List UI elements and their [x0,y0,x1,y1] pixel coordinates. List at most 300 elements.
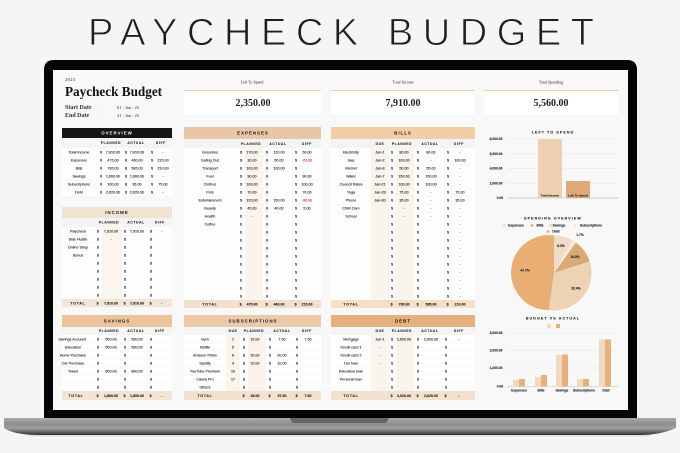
panel: subscriptions: Gym [201,337,209,341]
card: left to spend [184,80,321,114]
panel: overview: Expenses [71,158,87,162]
panel: overview: ACTUAL [127,141,145,145]
panel: expenses: - [251,214,253,218]
panel: subscriptions: $ [296,353,298,357]
chart: spending pie: 47.7% [520,268,530,272]
chart: spending overview legend: Expenses [508,224,524,228]
panel: expenses: $ [240,174,242,178]
panel: subscriptions: $ [243,394,245,398]
panel: bills: 55.00 [426,166,436,170]
sheet title block: 01 - Jan - 23 [117,105,140,110]
panel: bills: - [403,206,405,210]
panel: debt: $ [391,385,393,389]
panel: bills: - [459,278,461,282]
panel: subscriptions: $ [243,345,245,349]
panel: bills: - [430,214,432,218]
panel: debt: 2,620.00 [397,394,411,398]
panel: bills: 75.00 [455,190,465,194]
panel: debt: $ [445,394,447,398]
chart: budget vs actual bars: Expenses [511,388,527,392]
panel: income: $ [97,301,99,305]
panel: overview: 795.00 [107,166,119,170]
panel: bills: 100.00 [425,182,437,186]
panel: income: ACTUAL [127,221,145,225]
panel: debt: - [379,361,381,365]
panel: overview: - [162,174,164,178]
panel: savings: $ [97,361,99,365]
panel: bills: Jan-1 [375,150,385,154]
panel: income: 7,910.00 [104,301,118,305]
panel: expenses: $ [295,294,297,298]
panel: debt: DIFF [454,329,464,333]
panel: bills: DUE [376,142,384,146]
panel: expenses: $ [240,206,242,210]
panel: savings: Home Purchase [60,353,86,357]
panel: subscriptions: $ [296,361,298,365]
panel: bills: 100.00 [454,158,466,162]
panel: savings [58,315,172,400]
panel: savings: $ [150,377,152,381]
panel: expenses: Coffee [205,222,215,226]
panel: bills: Electricity [343,150,359,154]
panel: expenses: $ [240,238,242,242]
panel: expenses: 100.00 [273,166,285,170]
panel: expenses: Entertainment [199,198,221,202]
panel: expenses: 100.00 [246,166,258,170]
panel: expenses: $ [295,286,297,290]
panel: debt: TOTAL [343,394,359,398]
panel: bills: Jan-30 [374,198,386,202]
panel: bills: Phone [346,198,356,202]
chart: budget vs actual bars: Debt [602,388,611,392]
panel: subscriptions: $ [269,377,271,381]
panel: expenses: $ [240,254,242,258]
panel: debt: Credit card 2 [340,353,362,357]
panel: expenses: $ [240,262,242,266]
panel: expenses: $ [266,150,268,154]
panel: expenses: $ [266,190,268,194]
panel: bills: - [430,198,432,202]
panel: bills: - [459,206,461,210]
panel: expenses: $ [266,230,268,234]
panel: subscriptions: Amazon Prime [193,353,217,357]
panel: expenses: Groceries [202,150,218,154]
panel: subscriptions: 10 [231,369,235,373]
panel: expenses: $ [295,150,297,154]
panel: subscriptions: 7.50 [278,337,286,341]
panel: debt: $ [417,385,419,389]
panel: bills: $ [447,182,449,186]
panel: expenses: -20.00 [302,158,312,162]
panel: bills: - [459,238,461,242]
panel: bills: $ [447,230,449,234]
panel: overview: $ [100,166,102,170]
panel: overview: - [162,150,164,154]
panel: expenses: PLANNED [241,142,261,146]
panel: bills: $ [447,214,449,218]
panel: overview: 215.00 [157,158,169,162]
panel: income: $ [150,301,152,305]
panel: debt: $ [445,345,447,349]
panel: expenses: $ [295,230,297,234]
panel: subscriptions: $ [269,385,271,389]
panel: overview: 1,800.00 [106,174,120,178]
chart: left to spend bars [490,130,618,200]
panel: bills: - [430,190,432,194]
panel: debt [331,315,475,400]
panel: bills: $ [447,286,449,290]
panel: bills: Jan-7 [375,174,385,178]
panel: savings: $ [97,369,99,373]
chart: budget vs actual bars: 3,000.00 [490,331,503,335]
panel: debt: $ [391,337,393,341]
panel: bills: $ [417,198,419,202]
panel: overview: 100.00 [107,182,119,186]
panel: subscriptions: Spotify [199,361,211,365]
panel: savings: $ [97,345,99,349]
panel: subscriptions: YouTube Premium [190,369,220,373]
panel: expenses: 100.00 [301,182,313,186]
panel: savings: $ [150,345,152,349]
panel: overview: PLANNED [101,141,121,145]
panel: expenses: $ [266,158,268,162]
panel: expenses: DIFF [302,142,312,146]
panel: bills: - [459,262,461,266]
panel: income: $ [97,285,99,289]
panel: savings: $ [150,337,152,341]
panel: debt: $ [445,377,447,381]
panel: expenses: $ [266,174,268,178]
panel: savings: - [161,394,163,398]
panel: subscriptions: 45.00 [250,394,260,398]
sheet title block: Paycheck Budget [65,84,163,99]
panel: bills: - [459,166,461,170]
panel: debt: $ [417,361,419,365]
panel: bills: $ [391,198,393,202]
panel: income: $ [124,245,126,249]
panel: debt: $ [445,361,447,365]
panel: expenses: $ [240,230,242,234]
panel: overview: $ [151,166,153,170]
panel: bills: Child Care [342,206,360,210]
panel: bills: 50.00 [399,166,409,170]
panel: expenses: $ [240,214,242,218]
panel: bills: - [459,150,461,154]
panel: expenses: 460.00 [274,302,284,306]
panel: overview: 95.00 [132,182,142,186]
panel: subscriptions: $ [269,394,271,398]
panel: subscriptions: $ [296,377,298,381]
panel: savings: $ [97,353,99,357]
panel: subscriptions: SUBSCRIPTIONS [228,319,278,324]
panel: expenses: $ [240,270,242,274]
panel: subscriptions: $ [243,337,245,341]
panel: subscriptions: $ [296,345,298,349]
panel: expenses [184,127,321,308]
panel: subscriptions: $ [296,394,298,398]
panel: income: INCOME [105,210,129,215]
panel: bills: ACTUAL [421,142,439,146]
panel: savings: TOTAL [68,394,84,398]
panel: bills: - [459,286,461,290]
panel: subscriptions: 15.00 [250,337,260,341]
panel: debt: 2,620.00 [397,337,411,341]
panel: savings: 800.00 [105,369,117,373]
panel: expenses: 5.00 [303,206,311,210]
panel: debt: $ [417,345,419,349]
panel: bills: $ [447,262,449,266]
panel: income: $ [97,245,99,249]
panel: bills: DIFF [454,142,464,146]
panel: expenses: $ [266,262,268,266]
panel: subscriptions: 7.50 [304,337,312,341]
panel: expenses: $ [295,262,297,266]
chart: spending pie: 10.8% [570,255,580,259]
card: total income: Total Income [392,80,414,84]
panel: expenses: $ [266,222,268,226]
panel: expenses: EXPENSES [237,131,269,136]
panel: subscriptions: $ [243,361,245,365]
panel: expenses: $ [295,278,297,282]
panel: bills: 795.00 [398,302,410,306]
panel: expenses: $ [295,166,297,170]
panel: expenses: $ [295,158,297,162]
chart: spending pie [511,233,592,310]
panel: bills: $ [447,174,449,178]
panel: bills: Water [346,174,357,178]
panel: bills: $ [447,246,449,250]
panel: bills: $ [417,166,419,170]
panel: expenses: Fuel [206,174,214,178]
panel: bills: $ [417,222,419,226]
panel: bills: 100.00 [398,182,410,186]
panel: bills: $ [447,302,449,306]
panel: expenses: $ [295,190,297,194]
card: left to spend: Left To Spend [241,80,263,84]
panel: expenses: $ [295,198,297,202]
panel: debt: $ [445,353,447,357]
panel: bills: $ [391,270,393,274]
panel: expenses: 90.00 [247,174,257,178]
panel: bills: $ [391,174,393,178]
panel: bills: $ [417,230,419,234]
panel: debt: DEBT [395,319,411,324]
panel: expenses: Pets [206,190,214,194]
panel: bills: - [459,174,461,178]
panel: bills: $ [447,254,449,258]
panel: bills: $ [417,238,419,242]
panel: overview: $ [151,174,153,178]
panel: subscriptions: 17 [231,377,235,381]
chart: spending overview legend: Savings [553,224,565,228]
panel: overview: $ [100,158,102,162]
panel: expenses: 150.00 [273,198,285,202]
panel: debt: Credit card 1 [340,345,362,349]
panel: expenses: Transport [202,166,218,170]
panel: bills: 80.00 [426,150,436,154]
panel: subscriptions: Others [199,385,211,389]
panel: expenses: 40.00 [274,206,284,210]
panel: savings: $ [150,353,152,357]
chart: spending overview legend: Debt [552,230,561,234]
panel: bills: $ [447,150,449,154]
panel: bills: 210.00 [454,302,466,306]
panel: debt: $ [417,369,419,373]
panel: bills: $ [391,214,393,218]
panel: overview: $ [125,150,127,154]
panel: expenses: ACTUAL [269,142,287,146]
panel: overview: $ [151,150,153,154]
panel: bills: $ [447,278,449,282]
panel: overview: $ [125,182,127,186]
panel: income: 7,910.00 [130,229,144,233]
chart: budget vs actual bars: 0.00 [497,385,503,389]
panel: subscriptions: 7.50 [304,394,312,398]
panel: overview: Debt [75,190,83,194]
panel: subscriptions: $ [296,385,298,389]
panel: savings: $ [97,394,99,398]
panel: savings: $ [97,337,99,341]
panel: debt: $ [391,377,393,381]
panel: bills: $ [391,286,393,290]
panel: debt: $ [417,337,419,341]
panel: income: $ [150,261,152,265]
title: PAYCHECK BUDGET [88,12,594,54]
panel: overview: $ [151,158,153,162]
panel: bills: $ [447,158,449,162]
panel: savings: 1,800.00 [104,394,118,398]
panel: bills: 100.00 [398,158,410,162]
chart: left to spend bars: LEFT TO SPEND [532,130,574,134]
panel: income: 7,910.00 [104,229,118,233]
panel: expenses: $ [266,270,268,274]
panel: income: $ [124,261,126,265]
panel: debt: 2,620.00 [424,394,438,398]
panel: expenses: $ [295,270,297,274]
panel: overview: $ [125,174,127,178]
panel: income: Online Shop [68,245,88,249]
panel: overview: 1,800.00 [130,174,144,178]
panel: debt: ACTUAL [421,329,439,333]
panel: savings: PLANNED [99,329,119,333]
panel: savings: 800.00 [131,369,143,373]
panel: overview [62,128,172,196]
panel: expenses: TOTAL [202,302,218,306]
panel: expenses: $ [266,206,268,210]
panel: bills: - [403,214,405,218]
panel: income: $ [150,237,152,241]
panel: bills: - [459,222,461,226]
panel: bills: $ [417,270,419,274]
panel: bills: Jan-21 [374,182,386,186]
panel: income: Paycheck [70,229,86,233]
panel: bills: 80.00 [399,150,409,154]
panel: overview: DIFF [156,141,166,145]
chart: budget vs actual bars: Bills [538,388,545,392]
panel: debt: Education loan [339,369,363,373]
panel: expenses: 30.00 [247,158,257,162]
panel: bills: 150.00 [398,174,410,178]
panel: savings: SAVINGS [104,319,130,324]
panel: subscriptions [184,315,321,400]
chart: budget vs actual bars: Savings [556,388,568,392]
panel: debt: $ [417,394,419,398]
panel: bills: 75.00 [399,190,409,194]
panel: savings: Savings Account [58,337,86,341]
panel: savings: 500.00 [105,337,117,341]
panel: overview: $ [125,190,127,194]
chart: left to spend bars: 6,000.00 [490,152,503,156]
sheet title block: Start Date [65,105,92,111]
panel: bills: - [459,230,461,234]
panel: income: Side Hustle [69,237,87,241]
panel: bills: $ [417,150,419,154]
chart: budget vs actual bars: BUDGET VS ACTUAL [526,316,580,320]
panel: debt: $ [445,369,447,373]
panel: bills: $ [417,302,419,306]
panel: expenses: $ [240,190,242,194]
panel: overview: Total Income [69,150,89,154]
panel: bills: - [459,214,461,218]
panel: income: - [161,229,163,233]
panel: bills: - [430,158,432,162]
panel: bills: $ [447,206,449,210]
panel: savings: $ [150,361,152,365]
panel: expenses: $ [295,182,297,186]
panel: income: - [110,237,112,241]
panel: savings: $ [150,369,152,373]
card: total spending: 5,560.00 [534,98,568,109]
panel: expenses: $ [240,278,242,282]
panel: expenses: $ [240,150,242,154]
chart: spending overview legend: Bills [537,224,544,228]
panel: bills: $ [417,206,419,210]
panel: expenses: $ [295,206,297,210]
panel: bills: School [345,214,357,218]
chart: budget vs actual bars [490,316,618,392]
panel: bills: $ [417,190,419,194]
panel: overview: 75.00 [158,182,168,186]
chart: left to spend bars: 4,000.00 [490,167,503,171]
panel: income: $ [150,277,152,281]
panel: subscriptions: $ [269,337,271,341]
panel: income: - [161,301,163,305]
panel: bills: $ [447,294,449,298]
panel: overview: 2,620.00 [106,190,120,194]
panel: subscriptions: DUE [229,329,237,333]
panel: bills: $ [447,222,449,226]
panel: expenses: 45.00 [247,206,257,210]
panel: bills: 35.00 [455,198,465,202]
sheet title block: 31 - Jan - 23 [117,113,140,118]
panel: bills: Gas [348,158,355,162]
panel: bills: Jan-2 [375,158,385,162]
panel: savings: $ [150,394,152,398]
panel: overview: 460.00 [131,158,143,162]
panel: debt: Personal loan [340,377,362,381]
panel: income: $ [150,229,152,233]
panel: expenses: $ [295,238,297,242]
panel: bills: $ [447,270,449,274]
panel: subscriptions: $ [243,385,245,389]
panel: expenses: $ [266,166,268,170]
panel: bills: Jan-8 [375,166,385,170]
panel: expenses: $ [266,246,268,250]
panel: savings: $ [124,369,126,373]
panel: expenses: 215.00 [302,302,312,306]
panel: expenses: $ [266,294,268,298]
panel: income: TOTAL [70,301,86,305]
